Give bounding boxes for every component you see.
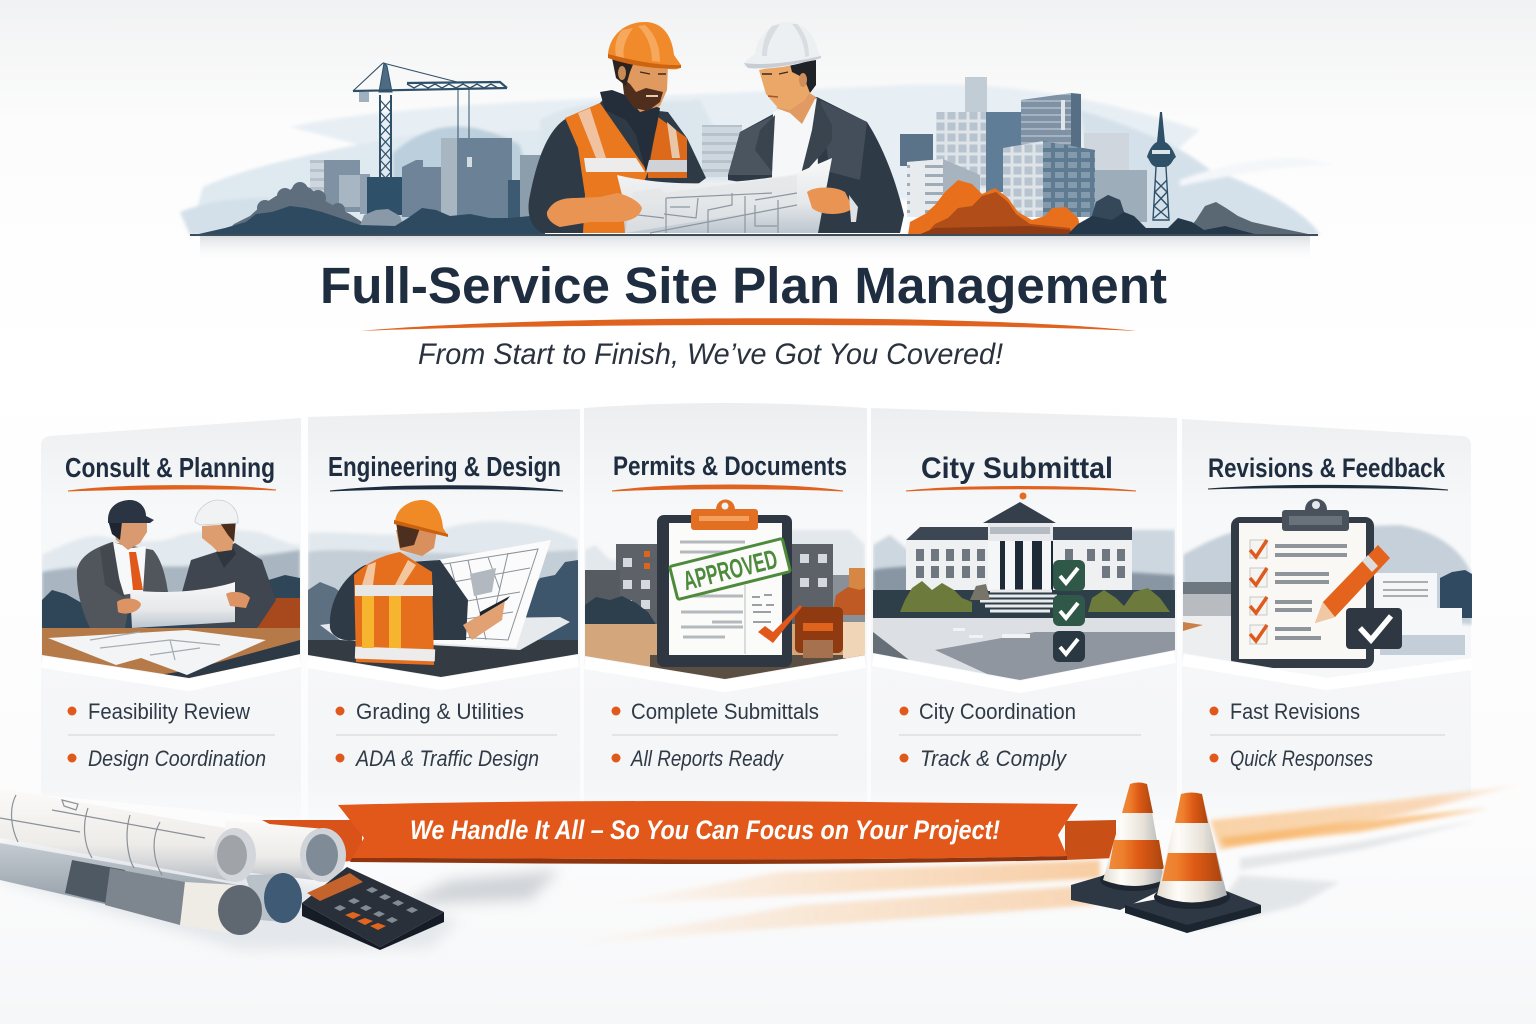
head — [622, 58, 668, 112]
check rows — [1250, 540, 1347, 644]
orange speed streaks — [400, 783, 1530, 945]
head — [759, 60, 812, 110]
helmet — [395, 500, 448, 536]
list — [68, 699, 275, 771]
left buildings — [310, 138, 542, 227]
illustration: engineer marking blueprint — [308, 500, 578, 680]
panel: revisions and feedback — [1182, 419, 1472, 820]
hero worker right: suit and white helmet — [728, 22, 904, 233]
man left — [77, 542, 168, 628]
heading: City Submittal — [921, 452, 1113, 485]
main band — [338, 801, 1078, 859]
check badge — [1346, 608, 1402, 649]
clipboard — [1231, 517, 1374, 668]
panel: engineering and design — [308, 409, 580, 820]
pencil — [1315, 545, 1390, 623]
hero blueprint — [617, 158, 832, 233]
documents — [1374, 573, 1437, 608]
right buildings — [702, 77, 1147, 222]
list: City Coordination — [919, 699, 1076, 724]
tower crane — [353, 63, 507, 212]
list: Design Coordination — [88, 746, 266, 771]
panel: permits and documents — [584, 403, 867, 820]
panel: city submittal — [871, 408, 1177, 820]
small roll — [245, 874, 283, 922]
left foreground trees — [190, 206, 545, 236]
clip — [716, 500, 735, 510]
list: ADA & Traffic Design — [354, 746, 539, 771]
slogan: We Handle It All – So You Can Focus on Your Project! — [410, 815, 1000, 845]
list: Grading & Utilities — [356, 699, 524, 724]
lower roll — [0, 843, 240, 935]
heading: Revisions & Feedback — [1208, 453, 1446, 483]
back roll — [225, 820, 325, 881]
heading: Permits & Documents — [613, 451, 847, 481]
keys — [334, 887, 418, 923]
hero hands and forearm — [547, 188, 858, 227]
checks — [1053, 560, 1085, 662]
title underline swoosh — [360, 318, 1136, 331]
list: Complete Submittals — [631, 699, 819, 724]
panel: consult and planning — [41, 418, 301, 820]
list — [336, 699, 557, 771]
cone shadow — [1200, 875, 1340, 930]
hero worker left: orange vest — [529, 22, 706, 233]
list: All Reports Ready — [629, 746, 785, 771]
illustration: two men with plans — [42, 500, 300, 680]
angled blueprint — [426, 540, 551, 648]
vest back — [330, 560, 468, 640]
heading: Engineering & Design — [328, 451, 561, 482]
underline — [1208, 485, 1448, 490]
pen — [480, 596, 510, 616]
list — [899, 699, 1141, 771]
right dark trees — [1066, 195, 1318, 236]
plaza — [873, 618, 1175, 680]
roll shadow — [0, 840, 460, 950]
list — [612, 699, 838, 771]
steps — [980, 591, 1062, 611]
subtitle: From Start to Finish, We’ve Got You Covered! — [418, 338, 1004, 371]
white chevron bands under illustrations — [42, 657, 1472, 687]
illustration: checklist and pencil — [1183, 499, 1472, 668]
illustration: city hall with checks — [873, 492, 1175, 680]
white helmet — [744, 22, 821, 69]
orange autumn bush — [908, 180, 1080, 235]
approved stamp: APPROVED — [680, 544, 780, 596]
hero illustration: skyline and two workers — [180, 22, 1336, 262]
shrubs — [900, 581, 1170, 612]
screen — [307, 873, 363, 901]
calculator — [302, 867, 444, 950]
left tail — [262, 820, 362, 862]
box — [795, 607, 843, 653]
rear cone — [1071, 782, 1172, 910]
left gray trees — [222, 182, 404, 236]
orange helmet — [608, 22, 681, 69]
front roll — [0, 788, 235, 882]
list — [1210, 699, 1445, 771]
orange check — [758, 605, 802, 643]
observation tower — [1147, 112, 1176, 220]
man right — [182, 543, 276, 628]
traffic cones — [1071, 782, 1340, 933]
held plan — [130, 582, 235, 628]
right tail — [1065, 820, 1116, 860]
illustration: approved clipboard — [585, 500, 865, 680]
underline — [612, 485, 843, 491]
approved stamp — [670, 538, 790, 600]
heading: Consult & Planning — [65, 452, 275, 483]
underline — [906, 486, 1136, 491]
ribbon banner — [262, 801, 1116, 864]
list: Fast Revisions — [1230, 699, 1360, 724]
title: Full-Service Site Plan Management — [320, 257, 1167, 314]
ground line — [190, 234, 1318, 236]
rolled blueprints — [0, 788, 460, 950]
underline — [330, 486, 563, 491]
list: Track & Comply — [920, 746, 1068, 771]
front cone — [1125, 792, 1261, 933]
list: Quick Responses — [1230, 746, 1373, 771]
list: Feasibility Review — [88, 699, 250, 724]
underline — [68, 486, 276, 491]
clipboard — [657, 515, 792, 667]
mist and hills — [180, 84, 1336, 235]
building — [906, 540, 1132, 590]
